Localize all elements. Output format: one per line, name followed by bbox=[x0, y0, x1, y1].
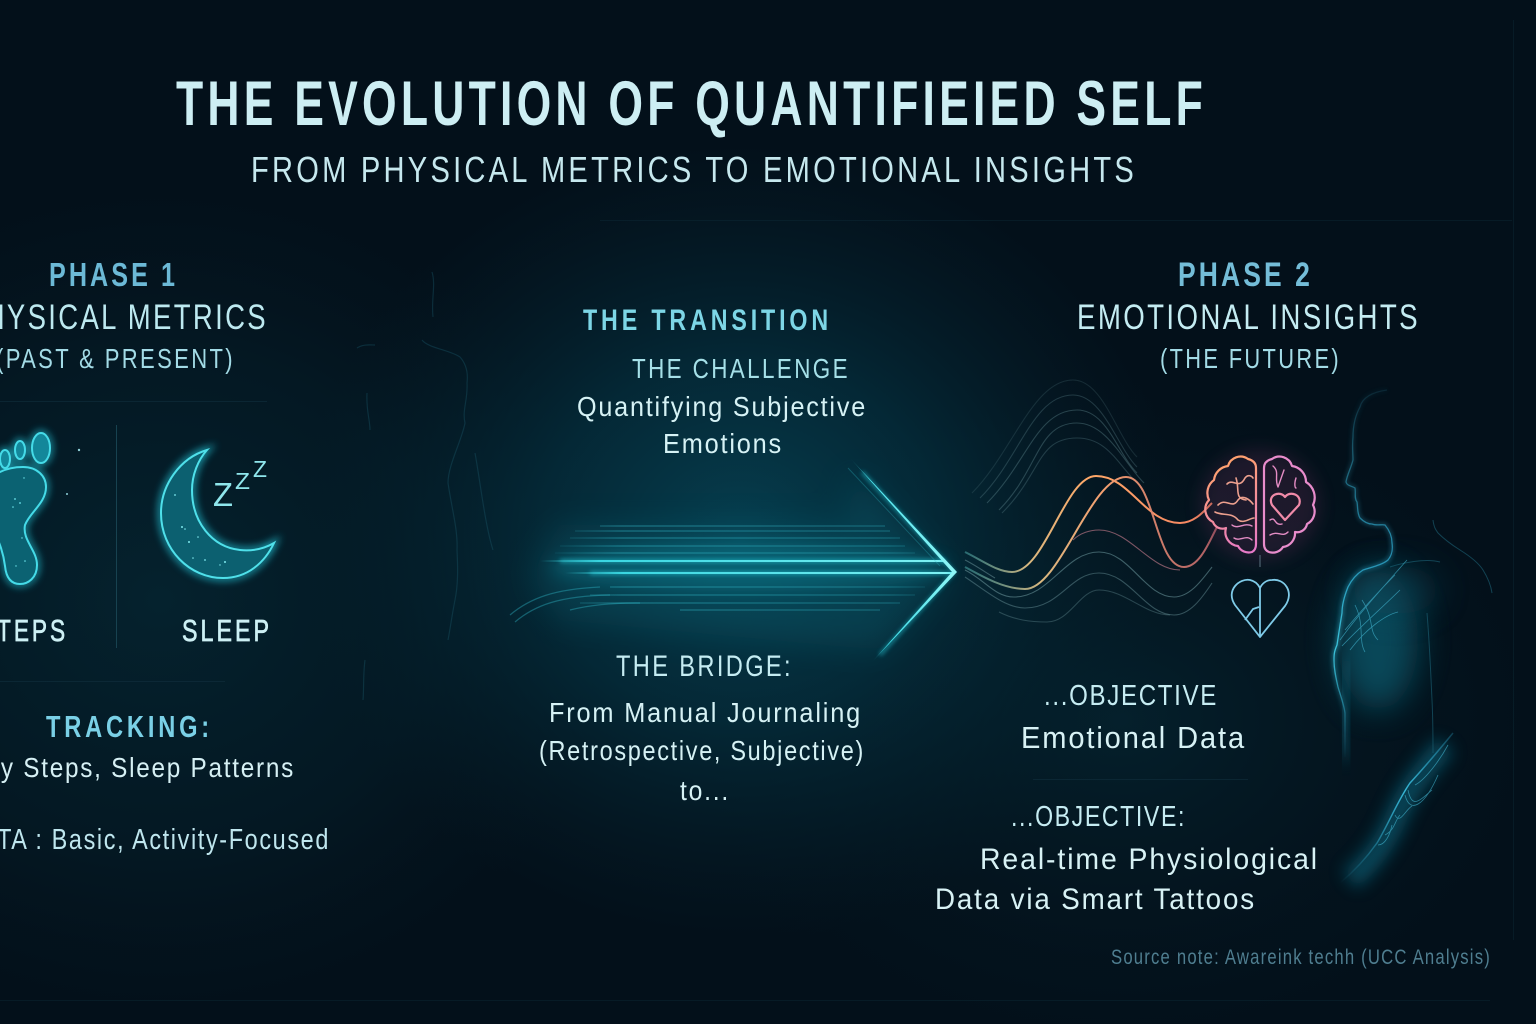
phase 1 period: (PAST & PRESENT) bbox=[0, 343, 235, 374]
icon: split heart bbox=[1232, 555, 1289, 637]
physiological data text line two: Data via Smart Tattoos bbox=[935, 883, 1256, 916]
icon: crescent moon with Z letters: Z bbox=[253, 456, 267, 482]
panel: phase 2 emotional insights bbox=[935, 256, 1492, 916]
phase 1 heading: PHASE 1 bbox=[49, 256, 178, 293]
phase 2 name: EMOTIONAL INSIGHTS bbox=[1077, 298, 1420, 337]
transition heading: THE TRANSITION bbox=[583, 304, 832, 337]
sleep label: SLEEP bbox=[182, 613, 272, 648]
figure silhouette bbox=[1334, 390, 1492, 883]
objective label two: ...OBJECTIVE: bbox=[1011, 801, 1186, 833]
faint background figure bbox=[357, 272, 493, 700]
bridge label: THE BRIDGE: bbox=[616, 650, 793, 683]
faint signal waves bbox=[965, 380, 1212, 622]
phase 2 period: (THE FUTURE) bbox=[1160, 343, 1341, 374]
icon: brain with heart bbox=[1200, 449, 1320, 561]
panel: the transition bbox=[510, 304, 957, 806]
challenge text: Quantifying Subjective bbox=[577, 391, 867, 422]
physiological data text: Real-time Physiological bbox=[980, 843, 1319, 876]
bridge text: From Manual Journaling bbox=[549, 697, 862, 728]
arrow bbox=[510, 458, 957, 662]
orange brain waves bbox=[965, 476, 1217, 589]
subtitle: FROM PHYSICAL METRICS TO EMOTIONAL INSIGHTS bbox=[251, 149, 1137, 190]
panel: phase 1 physical metrics bbox=[0, 256, 330, 856]
phase 2 heading: PHASE 2 bbox=[1178, 256, 1313, 294]
icon: crescent moon with Z letters: Z bbox=[235, 468, 250, 494]
icon: crescent moon with Z letters: Z bbox=[213, 476, 233, 513]
tracking heading: TRACKING: bbox=[46, 709, 213, 744]
challenge label: THE CHALLENGE bbox=[632, 353, 850, 384]
challenge text line two: Emotions bbox=[663, 428, 783, 459]
emotional data text: Emotional Data bbox=[1021, 720, 1246, 755]
icon: crescent moon with Z letters bbox=[161, 450, 274, 578]
icon: footprint bbox=[0, 433, 80, 584]
bridge text line three: to... bbox=[680, 775, 730, 806]
objective label: ...OBJECTIVE bbox=[1044, 680, 1218, 712]
bridge text line two: (Retrospective, Subjective) bbox=[539, 735, 865, 766]
